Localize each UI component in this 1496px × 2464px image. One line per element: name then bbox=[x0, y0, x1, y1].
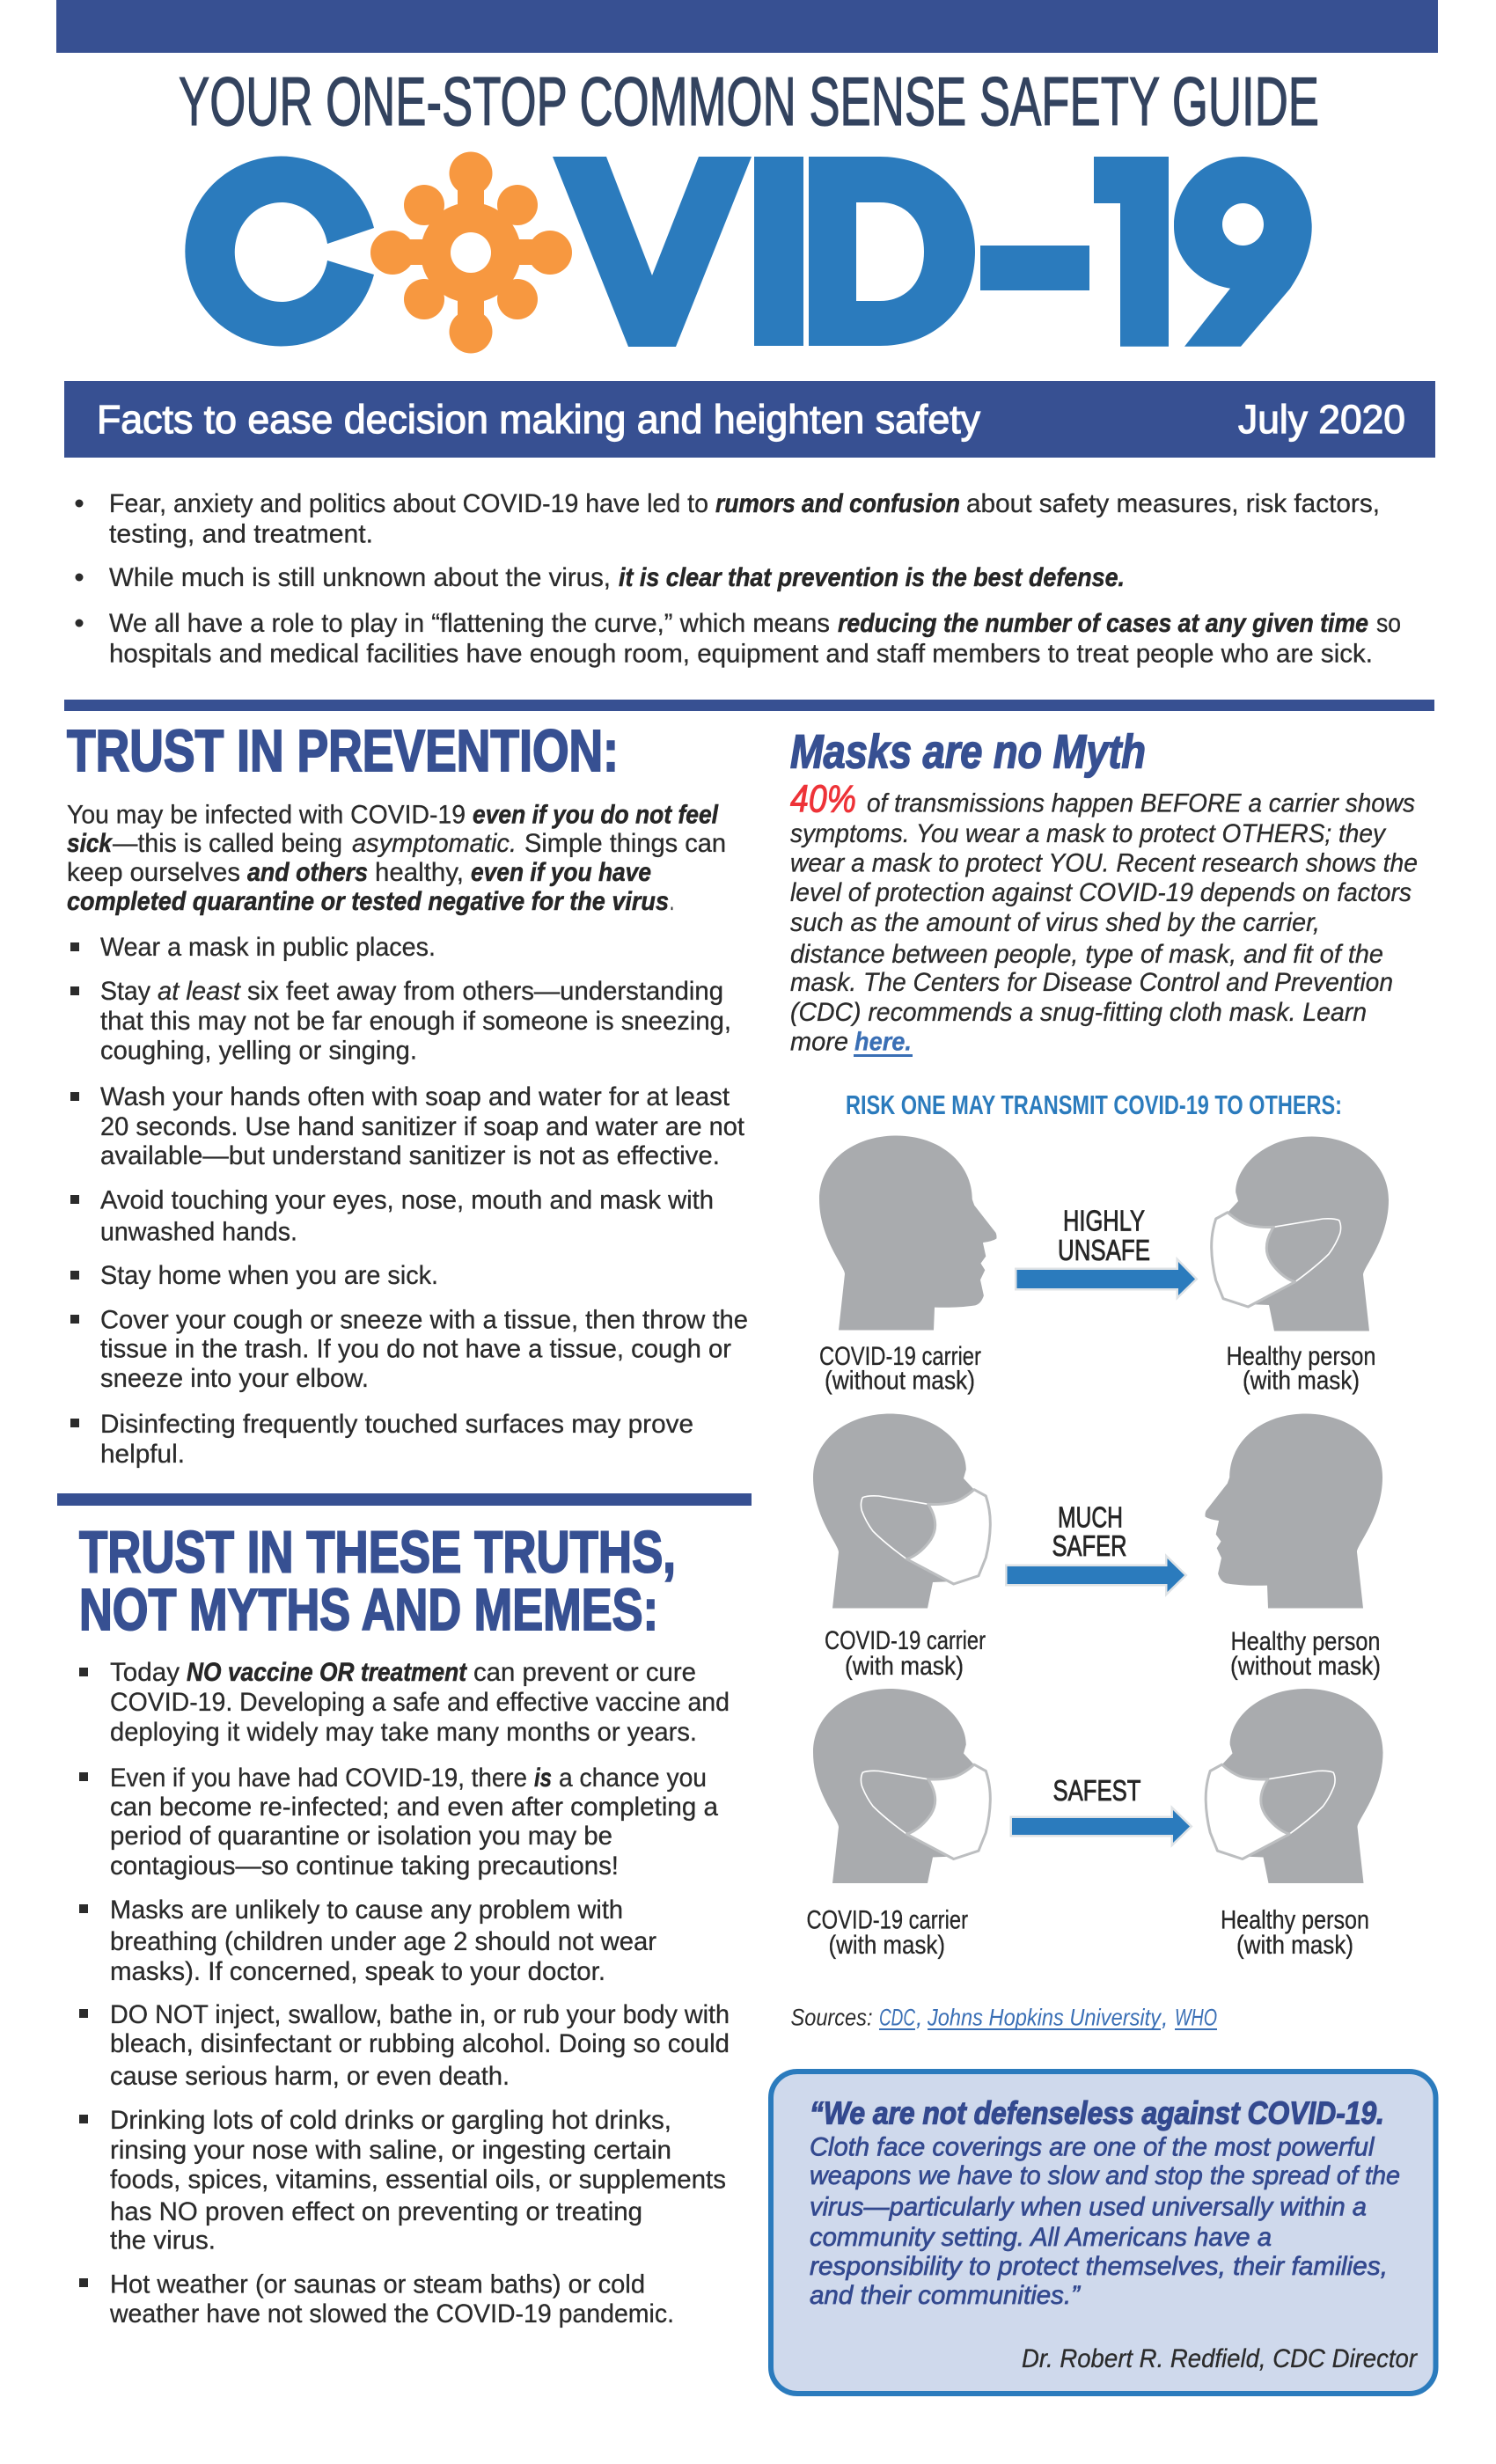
paragraph: asymptomatic: . bbox=[670, 887, 674, 916]
list: prevention tips: Stay home when you are sick. bbox=[100, 1261, 438, 1290]
head: carrier with mask bbox=[813, 1413, 990, 1609]
list: truths: foods, spices, vitamins, essential oils, or supplements bbox=[110, 2165, 726, 2195]
paragraph: masks: of transmissions happen BEFORE a carrier shows bbox=[867, 788, 1415, 818]
quote body bbox=[810, 2133, 1400, 2310]
paragraph: masks: here. bbox=[854, 1028, 912, 1056]
paragraph: masks: (CDC) recommends a snug-fitting cloth mask. Learn bbox=[790, 998, 1367, 1027]
list: prevention tips: available—but understand sanitizer is not as effective. bbox=[100, 1141, 720, 1170]
quote body: responsibility to protect themselves, their families, bbox=[810, 2252, 1388, 2281]
quote body: and their communities.” bbox=[810, 2281, 1082, 2310]
intro bullets: hospitals and medical facilities have enough room, equipment and staff members to treat people who are sick. bbox=[109, 639, 1373, 669]
paragraph: asymptomatic: Simple things can bbox=[524, 829, 726, 858]
label: much safer bbox=[1052, 1501, 1126, 1562]
list: prevention tips: unwashed hands. bbox=[100, 1218, 297, 1246]
label: healthy with mask: Healthy person bbox=[1221, 1906, 1369, 1934]
paragraph: masks: symptoms. You wear a mask to protect OTHERS; they bbox=[790, 819, 1387, 848]
label: healthy without mask: Healthy person bbox=[1230, 1627, 1380, 1656]
label: highly unsafe: UNSAFE bbox=[1058, 1234, 1150, 1266]
list: prevention tips: at least bbox=[158, 977, 242, 1006]
list: truths: masks). If concerned, speak to your doctor. bbox=[110, 1957, 605, 1986]
list: prevention tips: Wear a mask in public places. bbox=[100, 933, 436, 962]
list: truths: Drinking lots of cold drinks or gargling hot drinks, bbox=[110, 2106, 671, 2135]
list: prevention tips: 20 seconds. Use hand sanitizer if soap and water are not bbox=[100, 1112, 745, 1141]
label: carrier without mask bbox=[819, 1342, 981, 1396]
paragraph: masks bbox=[790, 788, 1418, 1057]
head: healthy person with mask bbox=[1206, 1689, 1383, 1883]
callout: Redfield quote bbox=[771, 2072, 1436, 2394]
list: truths: cause serious harm, or even death. bbox=[110, 2062, 510, 2091]
list: prevention tips: Stay bbox=[100, 977, 150, 1006]
arrow: carrier to healthy bbox=[1007, 1558, 1184, 1592]
heading: truths not myths: TRUST IN THESE TRUTHS, bbox=[79, 1519, 676, 1586]
intro bullets: so bbox=[1376, 609, 1401, 638]
sources: WHO bbox=[1175, 2005, 1217, 2031]
list: prevention tips: Wash your hands often with soap and water for at least bbox=[100, 1082, 730, 1111]
list: truths bbox=[79, 1658, 730, 2328]
paragraph: asymptomatic: healthy, bbox=[375, 858, 464, 887]
label: healthy without mask: (without mask) bbox=[1230, 1652, 1381, 1681]
banner subtitle: Facts to ease decision making and heighten safety bbox=[97, 397, 980, 442]
sources: Sources: bbox=[790, 2005, 873, 2031]
intro bullets: reducing the number of cases at any given time bbox=[838, 609, 1368, 638]
panel: masks are no myth bbox=[790, 725, 1418, 1057]
paragraph: asymptomatic: keep ourselves bbox=[67, 858, 240, 887]
intro bullets: it is clear that prevention is the best defense. bbox=[619, 563, 1125, 592]
label: healthy with mask: Healthy person bbox=[1227, 1342, 1376, 1371]
label: safest: SAFEST bbox=[1052, 1774, 1140, 1807]
stat: 40%: 40% bbox=[790, 778, 856, 820]
diagram row 1: highly unsafe bbox=[819, 1135, 1389, 1396]
head: healthy person with mask bbox=[1212, 1137, 1389, 1331]
letter C bbox=[185, 157, 374, 347]
list: truths: breathing (children under age 2 should not wear bbox=[110, 1927, 656, 1956]
sources bbox=[790, 2005, 1217, 2031]
list: truths: weather have not slowed the COVID-19 pandemic. bbox=[109, 2299, 674, 2328]
paragraph: asymptomatic: sick bbox=[67, 829, 113, 858]
list: truths: the virus. bbox=[110, 2226, 216, 2255]
quote lead: “We are not defenseless against COVID-19. bbox=[810, 2094, 1384, 2131]
label: healthy with mask: (with mask) bbox=[1243, 1366, 1360, 1396]
label: carrier with mask: COVID-19 carrier bbox=[825, 1626, 986, 1655]
list: truths: Masks are unlikely to cause any problem with bbox=[110, 1896, 623, 1925]
quote body: virus—particularly when used universally within a bbox=[810, 2193, 1367, 2221]
panel: trust in prevention bbox=[67, 718, 748, 1469]
label: much safer: SAFER bbox=[1052, 1529, 1126, 1562]
intro bullets bbox=[76, 489, 1401, 669]
diagram row 2: much safer bbox=[813, 1413, 1382, 1681]
list: truths: NO vaccine OR treatment bbox=[187, 1658, 468, 1687]
paragraph: asymptomatic: You may be infected with COVID-19 bbox=[67, 801, 466, 829]
quote body: community setting. All Americans have a bbox=[810, 2223, 1272, 2252]
banner bbox=[64, 381, 1435, 458]
quote body: weapons we have to slow and stop the spread of the bbox=[810, 2161, 1400, 2190]
list: prevention tips: tissue in the trash. If you do not have a tissue, cough or bbox=[100, 1334, 731, 1364]
icon: orange virus bbox=[370, 151, 572, 354]
paragraph: masks: more bbox=[790, 1028, 848, 1056]
heading: masks are no myth: Masks are no Myth bbox=[790, 725, 1146, 778]
paragraph: asymptomatic: and others bbox=[247, 858, 368, 887]
label: healthy with mask bbox=[1227, 1342, 1376, 1396]
list: prevention tips: Disinfecting frequently touched surfaces may prove bbox=[100, 1410, 693, 1439]
quote attribution: Dr. Robert R. Redfield, CDC Director bbox=[1022, 2344, 1418, 2373]
intro bullets: We all have a role to play in “flattening the curve,” which means bbox=[109, 609, 830, 638]
paragraph: masks: distance between people, type of mask, and fit of the bbox=[790, 940, 1383, 969]
list: truths: contagious—so continue taking precautions! bbox=[110, 1852, 619, 1881]
heading: truths not myths bbox=[79, 1519, 676, 1643]
label: highly unsafe bbox=[1058, 1204, 1150, 1266]
arrow: carrier to healthy bbox=[1012, 1810, 1190, 1843]
sources: , bbox=[916, 2005, 923, 2031]
list: truths: can prevent or cure bbox=[473, 1658, 696, 1687]
chart heading: risk of transmission: RISK ONE MAY TRANSMIT COVID-19 TO OTHERS: bbox=[846, 1089, 1342, 1120]
paragraph: asymptomatic bbox=[67, 801, 726, 916]
list: truths: bleach, disinfectant or rubbing alcohol. Doing so could bbox=[110, 2029, 730, 2058]
intro bullets: Fear, anxiety and politics about COVID-19 have led to bbox=[109, 489, 708, 518]
label: healthy without mask bbox=[1230, 1627, 1381, 1681]
logo: COVID-19 bbox=[185, 151, 1312, 354]
paragraph: asymptomatic: completed quarantine or tested negative for the virus bbox=[67, 887, 669, 916]
list: truths: Hot weather (or saunas or steam baths) or cold bbox=[110, 2270, 645, 2299]
list: truths: deploying it widely may take many months or years. bbox=[110, 1718, 697, 1747]
label: healthy with mask bbox=[1221, 1906, 1369, 1960]
paragraph: masks: wear a mask to protect YOU. Recent research shows the bbox=[790, 848, 1418, 878]
list: truths: is bbox=[534, 1764, 552, 1793]
quote body: Cloth face coverings are one of the most powerful bbox=[810, 2133, 1375, 2161]
label: carrier with mask bbox=[806, 1906, 968, 1960]
list: truths: period of quarantine or isolation you may be bbox=[110, 1822, 612, 1851]
head: healthy person without mask bbox=[1205, 1413, 1382, 1609]
panel: truths not myths bbox=[79, 1519, 730, 2328]
label: carrier with mask: (with mask) bbox=[829, 1931, 945, 1960]
list: prevention tips: Cover your cough or sneeze with a tissue, then throw the bbox=[100, 1306, 748, 1334]
heading: trust in prevention: TRUST IN PREVENTION: bbox=[67, 718, 619, 784]
label: highly unsafe: HIGHLY bbox=[1063, 1204, 1145, 1237]
paragraph: asymptomatic: —this is called being bbox=[113, 829, 342, 858]
list: prevention tips: sneeze into your elbow. bbox=[100, 1364, 369, 1393]
list: truths: Even if you have had COVID-19, there bbox=[110, 1764, 527, 1793]
list: prevention tips: helpful. bbox=[100, 1440, 185, 1469]
sources: , bbox=[1162, 2005, 1169, 2031]
heading: truths not myths: NOT MYTHS AND MEMES: bbox=[79, 1577, 658, 1643]
top bar bbox=[56, 0, 1438, 53]
list: truths: can become re-infected; and even after completing a bbox=[110, 1793, 718, 1822]
paragraph: masks: level of protection against COVID-19 depends on factors bbox=[790, 878, 1412, 907]
paragraph: asymptomatic: even if you have bbox=[471, 858, 651, 887]
label: carrier with mask: COVID-19 carrier bbox=[806, 1906, 968, 1934]
label: healthy with mask: (with mask) bbox=[1236, 1931, 1353, 1960]
intro bullets: rumors and confusion bbox=[715, 489, 960, 518]
list: truths: rinsing your nose with saline, or ingesting certain bbox=[110, 2136, 671, 2165]
list: prevention tips: six feet away from others—understanding bbox=[247, 977, 723, 1006]
list: truths: DO NOT inject, swallow, bathe in, or rub your body with bbox=[110, 2000, 730, 2029]
paragraph: asymptomatic: even if you do not feel bbox=[473, 801, 719, 829]
head: carrier with mask bbox=[813, 1689, 990, 1883]
label: much safer: MUCH bbox=[1058, 1501, 1123, 1533]
head: carrier without mask bbox=[819, 1135, 997, 1331]
list: truths: a chance you bbox=[559, 1764, 707, 1793]
label: carrier with mask bbox=[825, 1626, 986, 1681]
label: carrier without mask: (without mask) bbox=[825, 1366, 975, 1396]
list: truths: COVID-19. Developing a safe and effective vaccine and bbox=[110, 1688, 730, 1717]
sources: Johns Hopkins University bbox=[927, 2005, 1162, 2031]
list: truths: Today bbox=[110, 1658, 180, 1687]
intro bullets: testing, and treatment. bbox=[109, 519, 373, 549]
list: prevention tips bbox=[70, 933, 748, 1469]
paragraph: masks: mask. The Centers for Disease Control and Prevention bbox=[790, 968, 1393, 997]
label: carrier with mask: (with mask) bbox=[845, 1652, 964, 1681]
paragraph: asymptomatic: asymptomatic. bbox=[352, 829, 517, 858]
diagram row 3: safest bbox=[806, 1689, 1383, 1960]
list: prevention tips: Avoid touching your eyes, nose, mouth and mask with bbox=[100, 1186, 714, 1214]
intro bullets: about safety measures, risk factors, bbox=[966, 489, 1380, 518]
sources: CDC bbox=[879, 2005, 915, 2031]
letters VID-19 bbox=[553, 157, 1312, 347]
label: carrier without mask: COVID-19 carrier bbox=[819, 1342, 981, 1371]
list: truths: has NO proven effect on preventing or treating bbox=[110, 2197, 642, 2226]
arrow: carrier to healthy bbox=[1017, 1262, 1195, 1295]
intro bullets: While much is still unknown about the virus, bbox=[109, 563, 611, 592]
list: prevention tips: that this may not be far enough if someone is sneezing, bbox=[100, 1007, 731, 1036]
paragraph: masks: such as the amount of virus shed by the carrier, bbox=[790, 908, 1320, 937]
banner date: July 2020 bbox=[1238, 397, 1405, 442]
list: prevention tips: coughing, yelling or singing. bbox=[100, 1037, 417, 1065]
